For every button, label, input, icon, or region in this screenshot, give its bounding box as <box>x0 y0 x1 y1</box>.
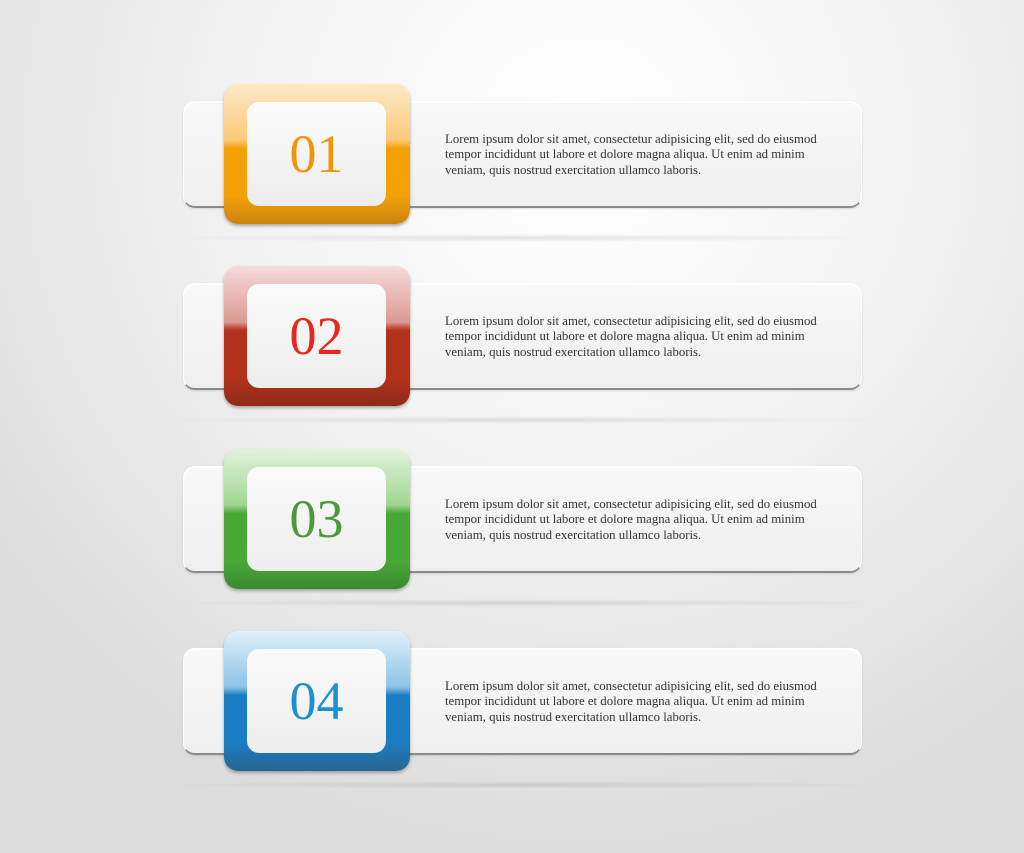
text 4: Lorem ipsum dolor sit amet, consectetur adipisicing elit, sed do eiusmod <box>445 679 817 693</box>
text 1 <box>445 132 817 177</box>
step 4 <box>182 631 862 788</box>
text 4: tempor incididunt ut labore et dolore magna aliqua. Ut enim ad minim <box>445 694 805 708</box>
text 2: Lorem ipsum dolor sit amet, consectetur adipisicing elit, sed do eiusmod <box>445 314 817 328</box>
text 2: tempor incididunt ut labore et dolore magna aliqua. Ut enim ad minim <box>445 329 805 343</box>
tab: 01 orange: 01 <box>290 124 344 184</box>
tab: 02 red <box>224 266 410 406</box>
text 1: Lorem ipsum dolor sit amet, consectetur adipisicing elit, sed do eiusmod <box>445 132 817 146</box>
step 2 <box>182 266 862 422</box>
text 3 <box>445 497 817 542</box>
panel: step 1 bar <box>183 101 862 208</box>
text 3: Lorem ipsum dolor sit amet, consectetur adipisicing elit, sed do eiusmod <box>445 497 817 511</box>
text 1: veniam, quis nostrud exercitation ullamco laboris. <box>445 163 701 177</box>
tab: 04 blue <box>224 631 410 771</box>
step 3 <box>182 449 862 606</box>
tab: 01 orange <box>224 84 410 224</box>
tab: 03 green: 03 <box>290 489 344 549</box>
text 4: veniam, quis nostrud exercitation ullamco laboris. <box>445 710 701 724</box>
tab: 02 red: 02 <box>290 306 344 366</box>
text 3: veniam, quis nostrud exercitation ullamco laboris. <box>445 528 701 542</box>
text 4 <box>445 679 817 724</box>
text 3: tempor incididunt ut labore et dolore magna aliqua. Ut enim ad minim <box>445 512 805 526</box>
tab: 04 blue: 04 <box>290 671 344 731</box>
panel: step 3 bar <box>183 466 862 573</box>
text 2 <box>445 314 817 359</box>
panel: step 4 bar <box>183 648 862 755</box>
text 2: veniam, quis nostrud exercitation ullamco laboris. <box>445 345 701 359</box>
panel: step 2 bar <box>183 283 862 390</box>
text 1: tempor incididunt ut labore et dolore magna aliqua. Ut enim ad minim <box>445 147 805 161</box>
step 1 <box>182 84 862 240</box>
tab: 03 green <box>224 449 410 589</box>
